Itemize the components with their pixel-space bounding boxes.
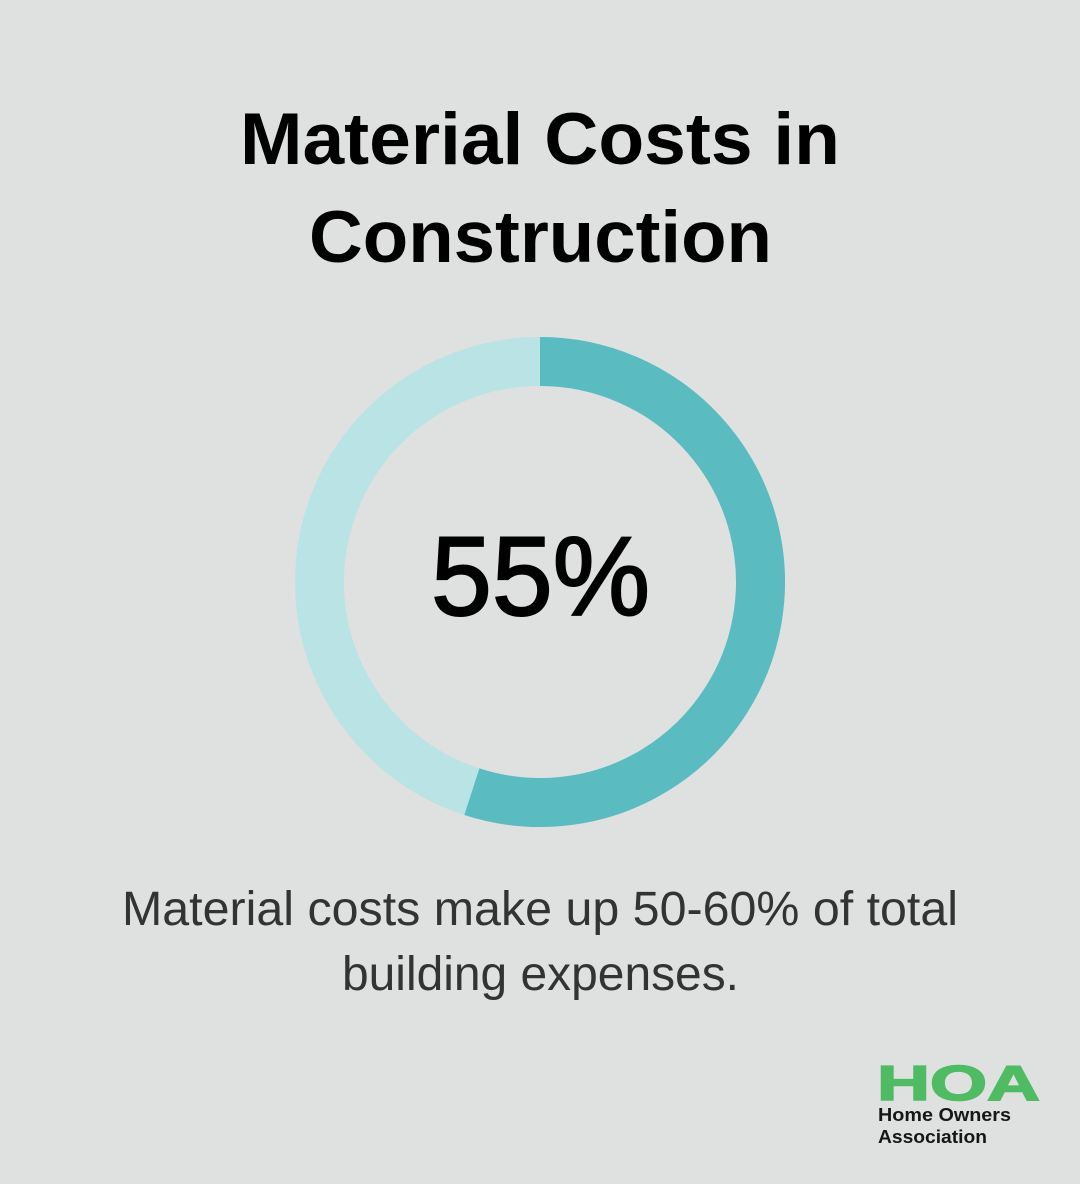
- title: Material Costs in: [240, 99, 840, 180]
- description text: [122, 883, 958, 1001]
- logo name: Association: [878, 1127, 987, 1147]
- logo: Home Owners Association: [877, 1057, 1040, 1147]
- title: Construction: [309, 197, 772, 278]
- 55% share arc: [472, 362, 760, 803]
- remaining share ring: [320, 362, 760, 802]
- donut chart: 55%: [320, 362, 760, 803]
- center value: 55%: [431, 514, 650, 639]
- title: [240, 99, 840, 278]
- logo name: Home Owners: [878, 1105, 1011, 1125]
- logo name: [878, 1105, 1011, 1147]
- description text: Material costs make up 50-60% of total: [122, 883, 958, 936]
- logo mark: HOA: [877, 1057, 1040, 1111]
- description text: building expenses.: [342, 948, 739, 1001]
